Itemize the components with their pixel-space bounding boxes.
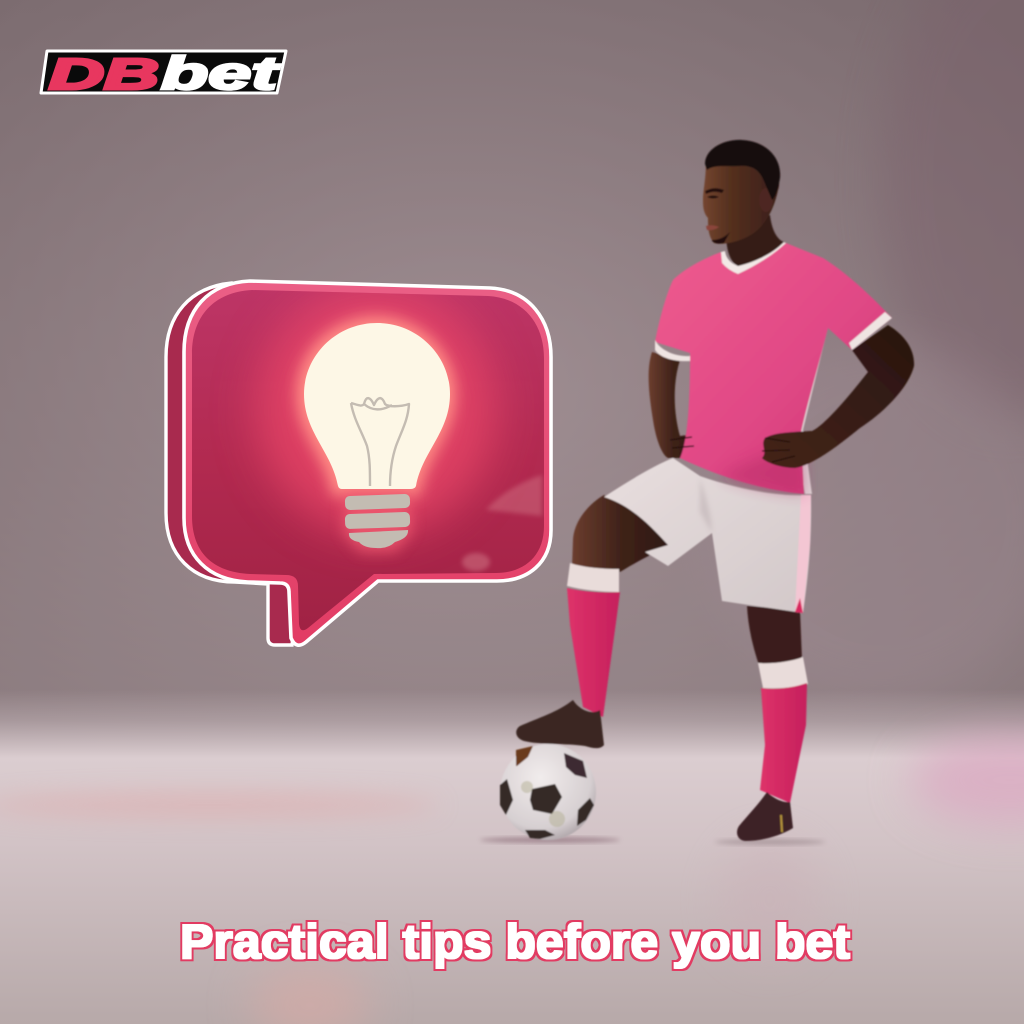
raised leg sock [567, 588, 620, 717]
speech bubble with light bulb [166, 281, 551, 645]
caption: Practical tips before you bet [180, 916, 850, 969]
left arm [649, 352, 697, 458]
soccer player [500, 140, 914, 841]
raised boot [516, 700, 604, 748]
bubble inner panel [192, 290, 544, 630]
jersey [655, 243, 892, 494]
logo: DBbet: bet [161, 47, 280, 99]
bulb glass [304, 323, 450, 489]
boot accent [781, 815, 782, 832]
floor [0, 690, 1024, 1024]
standing boot [737, 792, 793, 841]
bubble front face [184, 281, 551, 645]
raised thigh and knee [572, 495, 670, 572]
raised leg knee sock band [567, 563, 619, 592]
soccer ball [500, 744, 596, 840]
eyes and mouth [705, 188, 730, 244]
filament [351, 398, 409, 486]
shorts stripe [795, 495, 811, 613]
bubble back layer [166, 283, 300, 645]
bubble reflections [462, 475, 542, 571]
logo: DBbet [41, 47, 286, 99]
hand fingers [670, 437, 795, 462]
bulb glow [256, 285, 496, 552]
logo: DBbet: DB [49, 50, 159, 99]
neck [726, 215, 784, 266]
jersey collar [721, 241, 786, 274]
standing leg sock [760, 683, 807, 803]
sleeve cuffs [655, 312, 892, 361]
right arm and hand [762, 325, 914, 468]
shorts [604, 458, 811, 613]
shorts shading [700, 478, 712, 533]
jersey side panel [796, 327, 828, 494]
ear [759, 188, 773, 212]
standing leg knee sock band [758, 657, 808, 688]
standing lower leg [747, 606, 802, 668]
hair [705, 140, 780, 200]
jersey shading [720, 440, 804, 494]
head [703, 160, 779, 244]
bulb base [345, 494, 410, 548]
